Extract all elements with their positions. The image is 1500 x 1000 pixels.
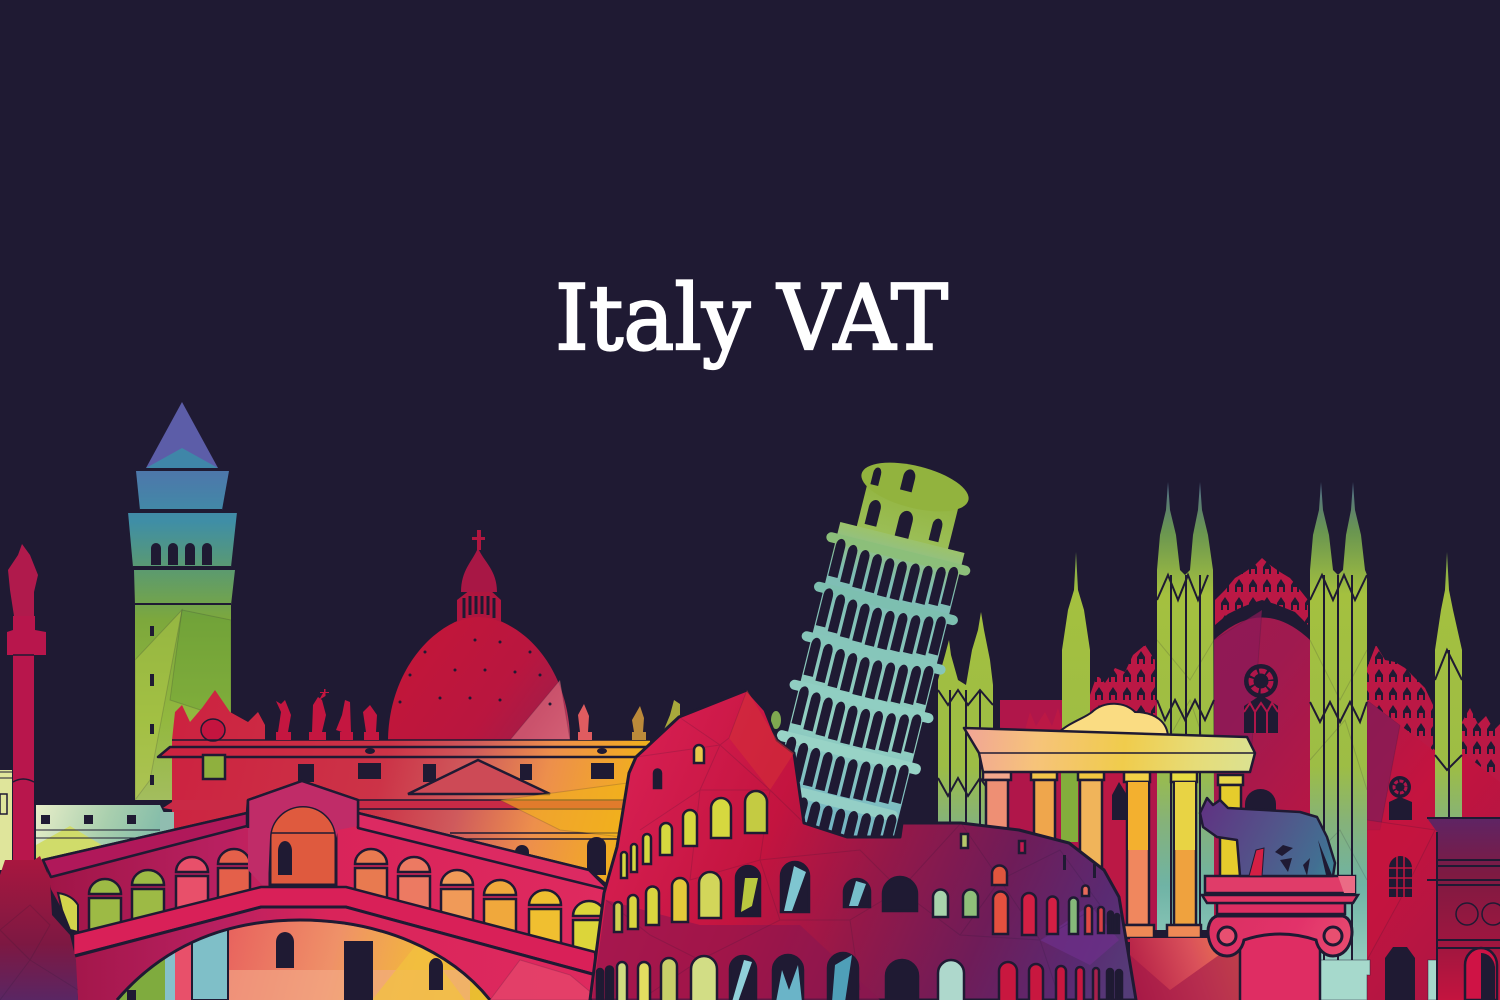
landmark: basilica facade bbox=[158, 690, 650, 900]
column base bbox=[0, 856, 78, 1000]
landmark: Milan cathedral wall bbox=[1000, 610, 1500, 1000]
landmark: column with statue bbox=[7, 544, 46, 860]
central arch bbox=[270, 806, 336, 885]
cathedral green spires bbox=[938, 482, 1462, 1000]
landmark: St Peter's dome bbox=[388, 530, 570, 742]
cathedral tracery bbox=[1025, 558, 1500, 782]
landmark: Leaning Tower of Pisa bbox=[751, 449, 992, 876]
lower windows bbox=[597, 953, 1122, 1000]
far left building bbox=[0, 770, 12, 870]
landmark: temple bbox=[964, 704, 1255, 1000]
cathedral plinths bbox=[1320, 960, 1437, 1000]
Pisa openings bbox=[765, 456, 980, 860]
cathedral windows bbox=[1244, 664, 1415, 1000]
landmark: Rialto bridge bbox=[43, 781, 609, 1000]
bridge deck bbox=[73, 887, 597, 975]
landmark: pedestal bbox=[1202, 876, 1358, 1000]
under-bridge buildings bbox=[118, 900, 490, 1000]
pale building bbox=[36, 805, 174, 860]
landmark: right-hand building bbox=[1427, 818, 1500, 1000]
bridge arches bbox=[89, 849, 605, 970]
facade statues bbox=[276, 689, 781, 740]
landmark: bell tower bbox=[128, 402, 237, 800]
title: Italy VAT bbox=[555, 266, 948, 371]
landmark: Colosseum bbox=[590, 690, 1136, 1000]
middle windows bbox=[614, 862, 1119, 935]
icon: she-wolf statue bbox=[1200, 798, 1335, 876]
upper windows bbox=[621, 745, 1089, 896]
temple columns bbox=[983, 772, 1243, 938]
